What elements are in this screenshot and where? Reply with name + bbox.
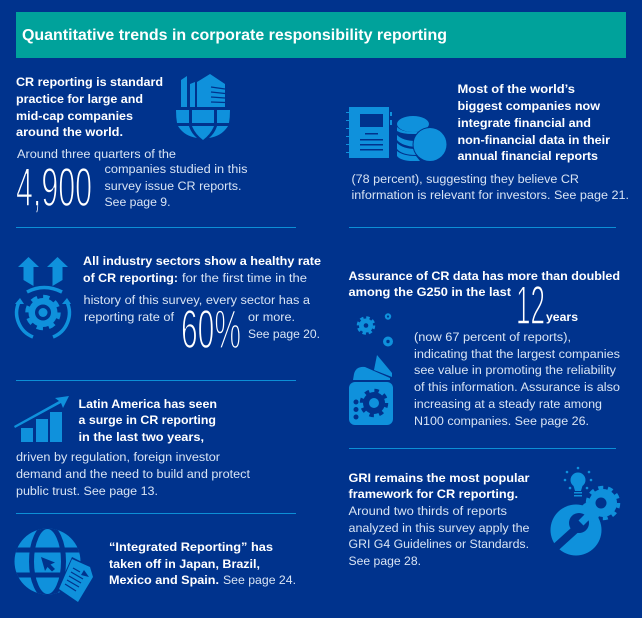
- icon: rising bars and arrow: [14, 396, 69, 442]
- heading: standard practice: [16, 75, 163, 139]
- panel: assurance of CR data: 12: [516, 274, 545, 336]
- text: GRI framework: See page 28.: [348, 554, 421, 568]
- panel: integrated financial data: [346, 82, 629, 202]
- text: GRI framework: [348, 471, 530, 568]
- title banner: Quantitative trends in corporate responsibility reporting: [22, 27, 447, 44]
- icon: bulb, gear and wrench: [550, 467, 618, 556]
- panel: integrated reporting: [10, 526, 296, 604]
- heading: standard practice: mid-cap companies: [16, 109, 133, 123]
- body text: 67 percent: (now 67 percent of reports),: [414, 330, 571, 344]
- icon: globe with cursor and document: [14, 528, 93, 602]
- panel: CR reporting is standard practice: [16, 74, 248, 218]
- heading: standard practice: CR reporting is standard: [16, 75, 163, 89]
- heading: integrate financial data: [458, 82, 610, 163]
- text: integrated reporting: taken off in Japan, Brazil,: [109, 557, 260, 571]
- big number: 4,900: 4,900: [16, 156, 92, 218]
- panel: all industry sectors: [15, 254, 321, 360]
- body text: around three quarters: Around three quarters of the: [17, 147, 176, 161]
- text: GRI framework: GRI remains the most popular: [348, 471, 530, 485]
- heading: integrate financial data: non-financial data in their: [458, 133, 610, 147]
- text: integrated reporting: “Integrated Reporting” has: [109, 540, 273, 554]
- body text: 78 percent: (78 percent), suggesting they believe CR: [352, 172, 579, 186]
- heading and body text: sector rates: All industry sectors show a healthy rate: [83, 254, 321, 268]
- body text: drivers: demand and the need to build and protect: [16, 467, 251, 481]
- heading: integrate financial data: integrate financial and: [458, 116, 591, 130]
- body text: around three quarters: [17, 147, 248, 209]
- heading: integrate financial data: Most of the world’s: [458, 82, 575, 96]
- body text: 67 percent: increasing at a steady rate among: [414, 397, 602, 411]
- text: GRI framework: Around two thirds of reports: [348, 504, 507, 518]
- text: integrated reporting: See page 24.: [223, 573, 296, 587]
- heading and body text: sector rates: [83, 254, 321, 341]
- heading and body text: sector rates: of CR reporting:: [83, 271, 178, 285]
- heading: surge in reporting: Latin America has seen: [78, 397, 217, 411]
- text: GRI framework: GRI G4 Guidelines or Standards.: [348, 537, 529, 551]
- title banner: [16, 12, 626, 58]
- heading: standard practice: around the world.: [16, 125, 123, 139]
- body text: drivers: [16, 450, 251, 498]
- body text: 67 percent: see value in promoting the reliability: [414, 363, 617, 377]
- body text: 67 percent: of this information. Assurance is also: [414, 380, 620, 394]
- heading: assurance doubled: years: [546, 310, 578, 324]
- heading: integrate financial data: biggest companies now: [458, 99, 600, 113]
- heading and body text: sector rates: for the first time in the: [182, 271, 307, 285]
- heading and body text: sector rates: history of this survey, every sector has a: [84, 293, 310, 307]
- body text: around three quarters: survey issue CR reports.: [104, 179, 242, 193]
- heading and body text: sector rates: reporting rate of: [84, 310, 175, 324]
- icon: building on globe: [176, 74, 230, 140]
- icon: gears and box: [349, 313, 393, 425]
- heading: integrate financial data: annual financial reports: [458, 149, 598, 163]
- heading: assurance doubled: among the G250 in the last: [348, 285, 511, 299]
- big number: 60%: 60%: [181, 298, 241, 360]
- body text: 78 percent: [352, 172, 629, 202]
- panel: GRI framework: [348, 467, 618, 568]
- heading: surge in reporting: a surge in CR reporting: [78, 413, 216, 427]
- text: integrated reporting: [109, 540, 296, 587]
- heading and body text: sector rates: or more.: [248, 310, 295, 324]
- heading: surge in reporting: in the last two years,: [78, 430, 204, 444]
- text: GRI framework: analyzed in this survey apply the: [348, 521, 530, 535]
- body text: around three quarters: companies studied in this: [104, 162, 248, 176]
- panel: assurance of CR data: [348, 269, 620, 428]
- body text: 78 percent: information is relevant for investors. See page 21.: [352, 188, 629, 202]
- heading and body text: sector rates: See page 20.: [248, 327, 320, 341]
- heading: assurance doubled: [348, 269, 620, 324]
- text: GRI framework: framework for CR reporting.: [348, 487, 518, 501]
- heading: surge in reporting: [78, 397, 217, 444]
- body text: around three quarters: See page 9.: [104, 195, 170, 209]
- heading: assurance doubled: Assurance of CR data has more than doubled: [348, 269, 620, 283]
- body text: drivers: public trust. See page 13.: [16, 484, 158, 498]
- body text: 67 percent: [414, 330, 620, 428]
- icon: report and coins: [346, 107, 448, 162]
- heading: standard practice: practice for large and: [16, 92, 143, 106]
- icon: arrows and gear: [15, 257, 71, 337]
- body text: drivers: driven by regulation, foreign investor: [16, 450, 220, 464]
- body text: 67 percent: N100 companies. See page 26.: [414, 414, 589, 428]
- text: integrated reporting: Mexico and Spain.: [109, 573, 219, 587]
- panel: Latin America: [14, 396, 251, 498]
- body text: 67 percent: indicating that the largest companies: [414, 347, 620, 361]
